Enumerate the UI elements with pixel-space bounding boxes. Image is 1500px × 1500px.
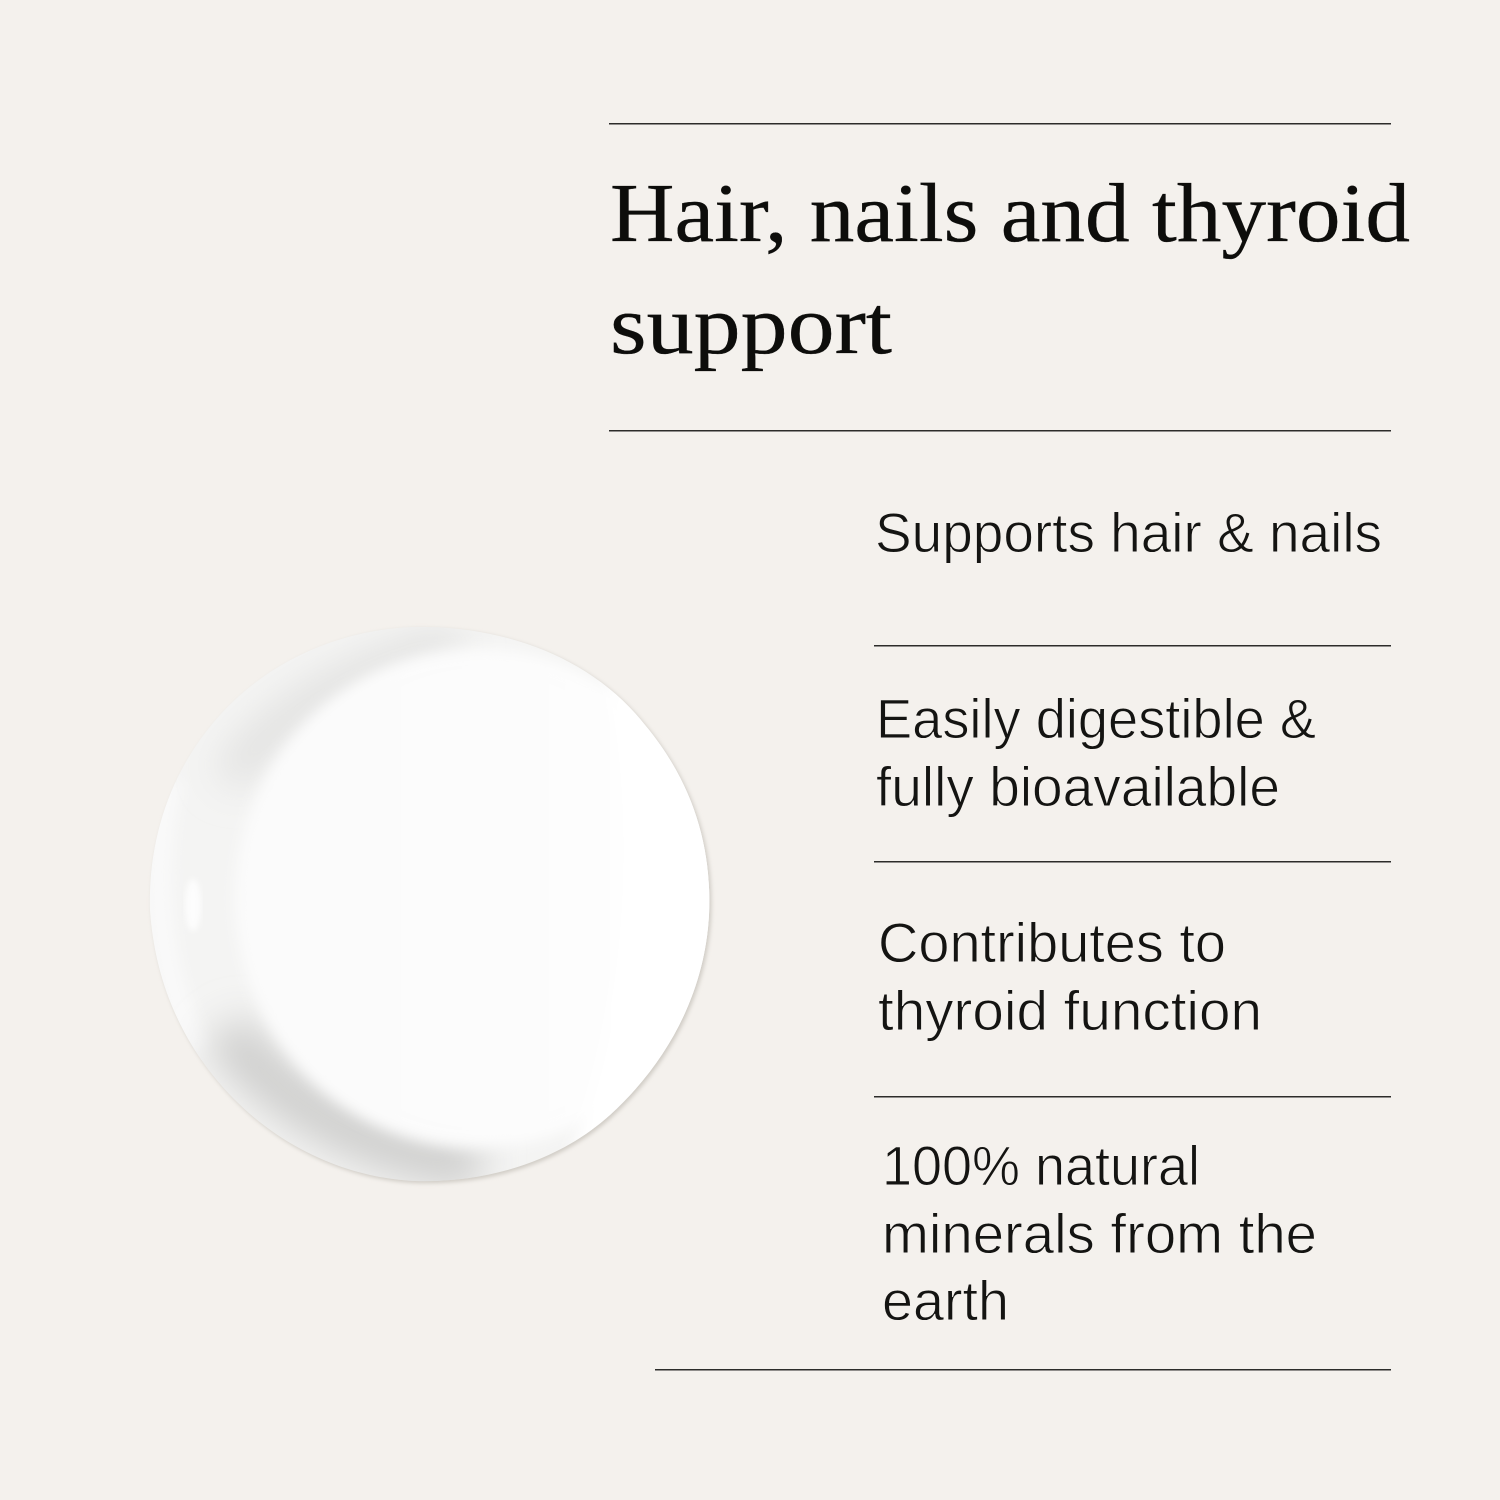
heading: Hair, nails and thyroid (610, 167, 1410, 260)
benefit: digestible: Easily digestible & (876, 687, 1316, 750)
droplet inner pool (235, 648, 721, 1148)
droplet glint (188, 884, 198, 926)
droplet rim shade bottom-left (225, 1030, 480, 1165)
rule: below heading (609, 430, 1391, 432)
droplet body (140, 620, 721, 1190)
heading: support (610, 279, 892, 372)
droplet outer highlight (159, 780, 200, 1050)
rule: benefit 1 (874, 645, 1391, 646)
benefit: natural minerals: minerals from the (882, 1202, 1317, 1265)
benefit: digestible: fully bioavailable (876, 755, 1280, 818)
benefit: thyroid: thyroid function (878, 979, 1262, 1042)
benefit: natural minerals: earth (882, 1269, 1009, 1332)
benefit: thyroid: Contributes to (878, 911, 1226, 974)
droplet right side (575, 1011, 686, 1141)
rule: bottom (655, 1369, 1391, 1370)
benefit: digestible (876, 687, 1316, 818)
benefit: hair and nails: Supports hair & nails (875, 501, 1382, 564)
rule: top (609, 123, 1391, 124)
illustration: white mineral droplet (140, 620, 721, 1190)
benefit: natural minerals (882, 1134, 1317, 1332)
benefit: thyroid (878, 911, 1262, 1042)
rule: benefit 3 (874, 1096, 1391, 1098)
droplet rim (166, 627, 632, 1182)
droplet shadow (152, 629, 711, 1183)
benefit: natural minerals: 100% natural (882, 1134, 1200, 1197)
droplet rim shade top-left (230, 645, 460, 780)
rule: benefit 2 (874, 861, 1391, 862)
heading (610, 167, 1410, 372)
